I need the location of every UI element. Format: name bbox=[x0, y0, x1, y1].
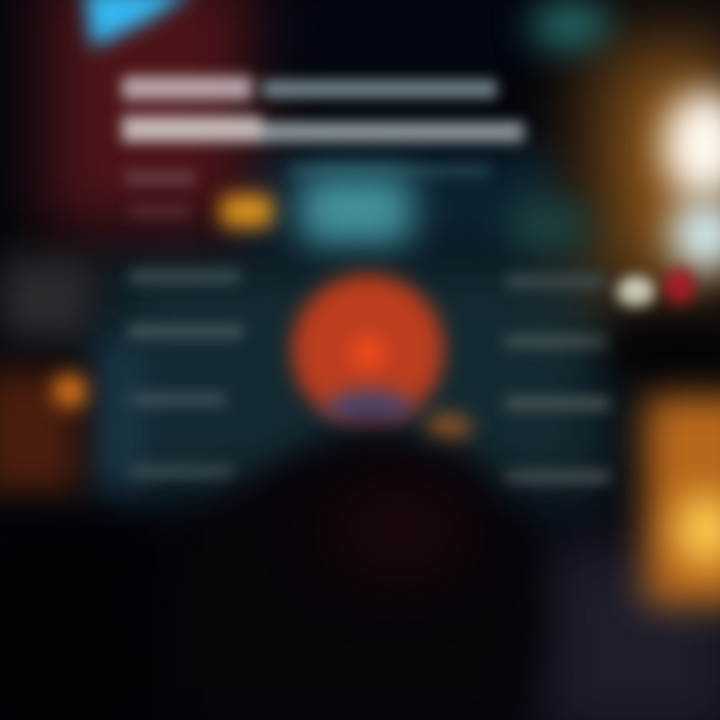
title bbox=[122, 76, 524, 142]
icon: red circle bbox=[292, 274, 444, 426]
list: left column bbox=[128, 270, 243, 478]
icon: lower right orange light bbox=[645, 395, 720, 605]
badge: teal bbox=[300, 176, 412, 244]
icon: right lights bbox=[610, 91, 720, 372]
badge: green right bbox=[506, 199, 594, 251]
panel: dark red upper left bbox=[45, 0, 250, 230]
icon: blue shape top left bbox=[84, 0, 195, 48]
list: right column bbox=[505, 275, 610, 483]
icon: hand silhouette bbox=[0, 390, 545, 720]
badge: orange bbox=[220, 194, 274, 228]
icon: teal blob top right bbox=[530, 1, 610, 49]
icon: left orange glow bbox=[0, 370, 87, 495]
panel: warm glow upper right bbox=[590, 40, 720, 300]
subtitle text bbox=[125, 166, 490, 216]
